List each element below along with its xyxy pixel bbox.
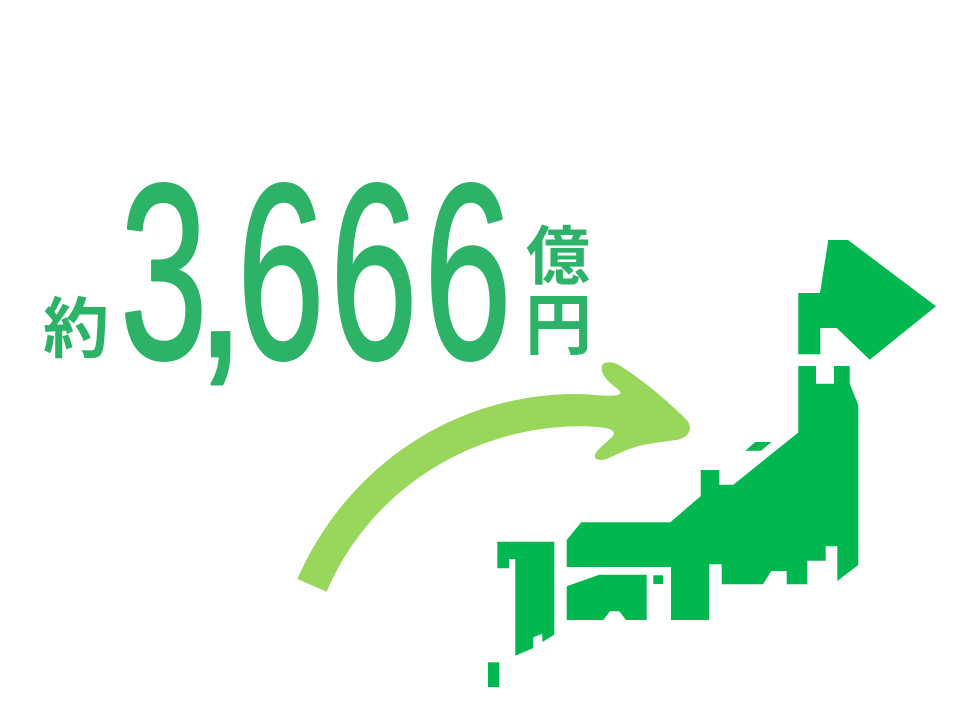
digit 6: 6 [330,133,418,412]
Okinawa [488,662,499,687]
Awaji island [653,575,663,584]
digit 6: 6 [237,133,325,412]
comma: , [195,157,246,403]
arrow pointing to map [297,362,690,592]
digit 6: 6 [424,133,512,412]
prefix: about: 約 [43,292,109,366]
Kyushu [497,542,554,656]
Shikoku [567,575,647,620]
headline amount: about 366.6 billion yen [43,133,592,412]
Sado island [745,442,772,451]
Hokkaido [798,240,936,360]
unit: yen: 円 [525,289,592,364]
unit: oku: 億 [526,221,590,293]
Honshu [567,366,858,620]
digit 3: 3 [120,133,208,412]
map of Japan [488,240,936,687]
